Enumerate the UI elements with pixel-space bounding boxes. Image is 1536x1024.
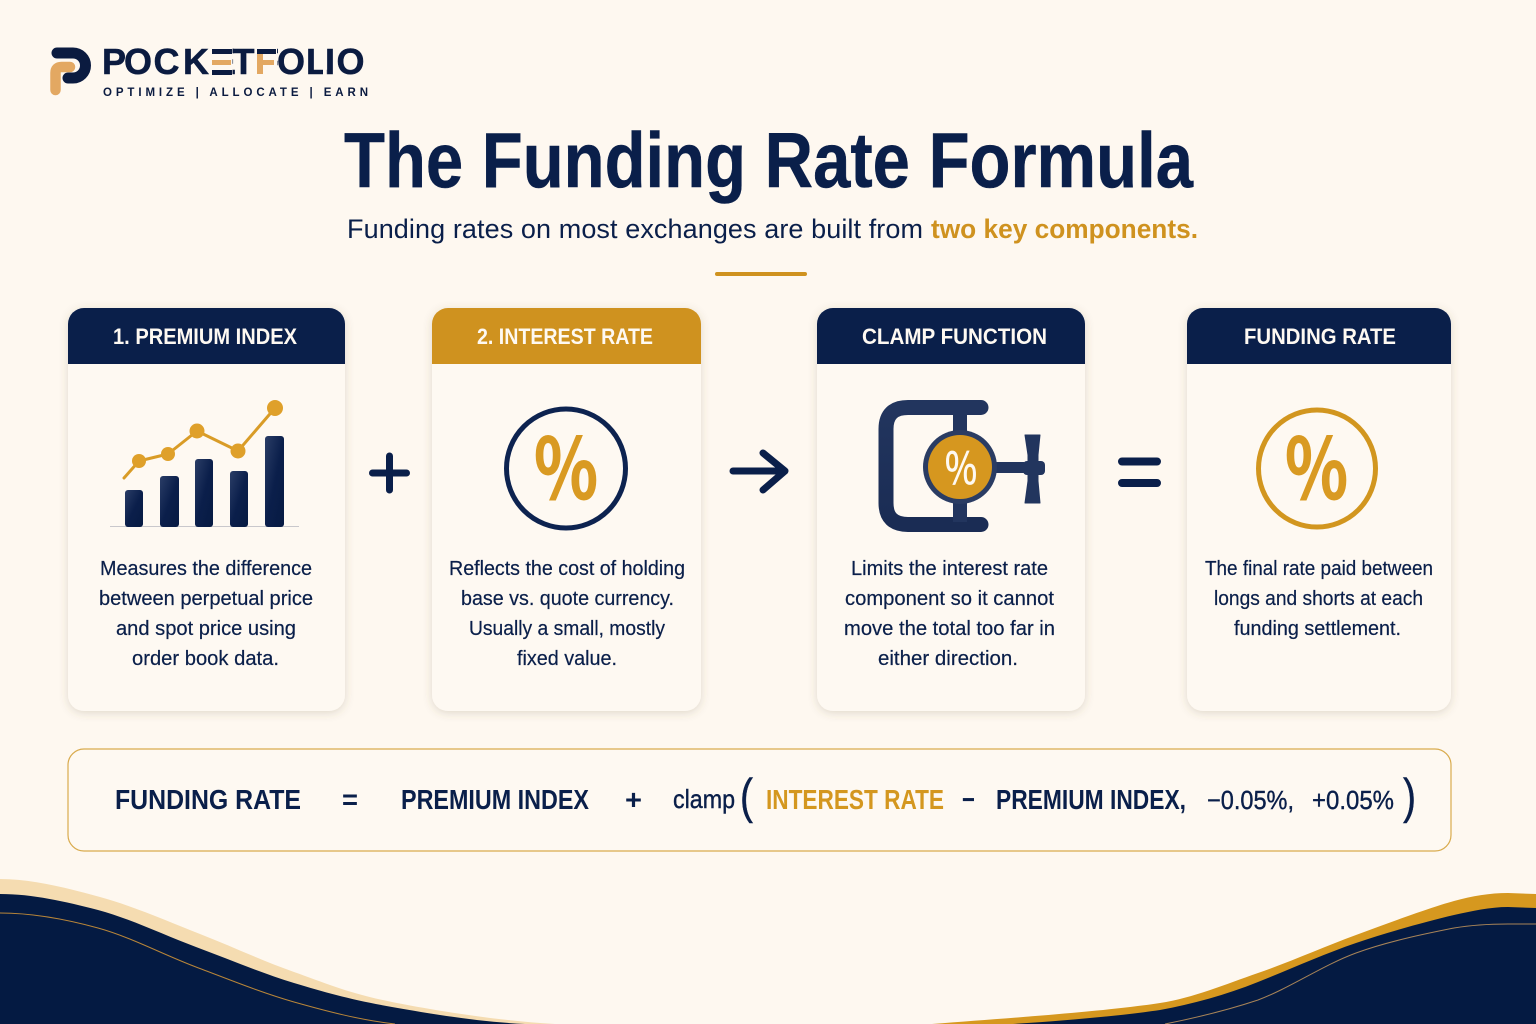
formula text: = — [342, 784, 358, 815]
text: clamp function description: Limits the interest rate — [851, 558, 1048, 580]
text: funding rate description — [1205, 558, 1433, 640]
logo mark — [56, 53, 85, 90]
icon: clamp squeezing percent: % — [945, 433, 977, 497]
formula text: +0.05% — [1312, 785, 1394, 815]
title: The Funding Rate Formula — [344, 116, 1194, 204]
icon: clamp squeezing percent — [886, 408, 1045, 524]
text: premium index description — [99, 558, 313, 670]
formula text: PREMIUM INDEX — [401, 784, 589, 815]
panel: funding rate — [1187, 308, 1451, 711]
subtitle: Funding rates on most exchanges are built from — [347, 214, 923, 244]
subtitle: two key components. — [931, 214, 1198, 244]
text: clamp function description: either direction. — [878, 648, 1018, 670]
icon: percent in circle: % — [534, 403, 598, 524]
panel: clamp function — [817, 308, 1085, 711]
header: interest rate — [432, 308, 701, 364]
header: premium index: 1. PREMIUM INDEX — [113, 324, 297, 349]
panel: premium index — [68, 308, 345, 711]
text: premium index description: order book data. — [132, 648, 279, 670]
text: premium index description: between perpetual price — [99, 588, 313, 610]
formula text — [115, 770, 1416, 824]
text: interest rate description: fixed value. — [517, 648, 617, 670]
formula text: ) — [1403, 770, 1416, 824]
text: interest rate description — [449, 558, 685, 670]
icon: equals — [1122, 462, 1157, 483]
formula text: INTEREST RATE — [766, 784, 944, 815]
formula text: PREMIUM INDEX, — [996, 784, 1186, 815]
text: clamp function description: move the total too far in — [844, 618, 1055, 640]
header: funding rate — [1187, 308, 1451, 364]
icon: plus — [372, 456, 406, 490]
text: interest rate description: Reflects the cost of holding — [449, 558, 685, 580]
text: interest rate description: base vs. quote currency. — [461, 588, 674, 610]
formula text: ( — [740, 770, 754, 824]
icon: gold percent in circle — [1258, 403, 1376, 527]
logo — [56, 41, 368, 99]
footer wave left — [0, 879, 555, 1024]
icon: bar and line chart — [110, 400, 299, 527]
text: funding rate description: funding settlement. — [1234, 618, 1401, 640]
header: clamp function — [817, 308, 1085, 364]
text: interest rate description: Usually a small, mostly — [469, 618, 665, 640]
formula text: clamp — [673, 784, 735, 814]
panel: formula bar — [68, 749, 1451, 851]
header: funding rate: FUNDING RATE — [1244, 324, 1396, 349]
text: premium index description: Measures the difference — [100, 558, 312, 580]
text: funding rate description: longs and shorts at each — [1214, 588, 1423, 610]
formula text: − — [962, 784, 975, 815]
subtitle — [347, 214, 1198, 244]
icon: arrow — [733, 453, 785, 490]
logo wordmark: POCKETFOLIO — [102, 41, 365, 82]
icon: gold percent in circle: % — [1285, 403, 1348, 524]
footer wave right — [932, 893, 1536, 1024]
formula text: FUNDING RATE — [115, 784, 301, 815]
header: premium index — [68, 308, 345, 364]
header: clamp function: CLAMP FUNCTION — [862, 324, 1047, 349]
text: clamp function description — [844, 558, 1055, 670]
panel: interest rate — [432, 308, 701, 711]
icon: percent in circle — [506, 403, 626, 528]
text: funding rate description: The final rate paid between — [1205, 558, 1433, 580]
header: interest rate: 2. INTEREST RATE — [477, 324, 653, 349]
text: premium index description: and spot price using — [116, 618, 296, 640]
formula text: + — [625, 784, 642, 815]
text: clamp function description: component so it cannot — [845, 588, 1054, 610]
formula text: −0.05%, — [1207, 785, 1294, 815]
logo tagline: OPTIMIZE | ALLOCATE | EARN — [103, 87, 368, 99]
